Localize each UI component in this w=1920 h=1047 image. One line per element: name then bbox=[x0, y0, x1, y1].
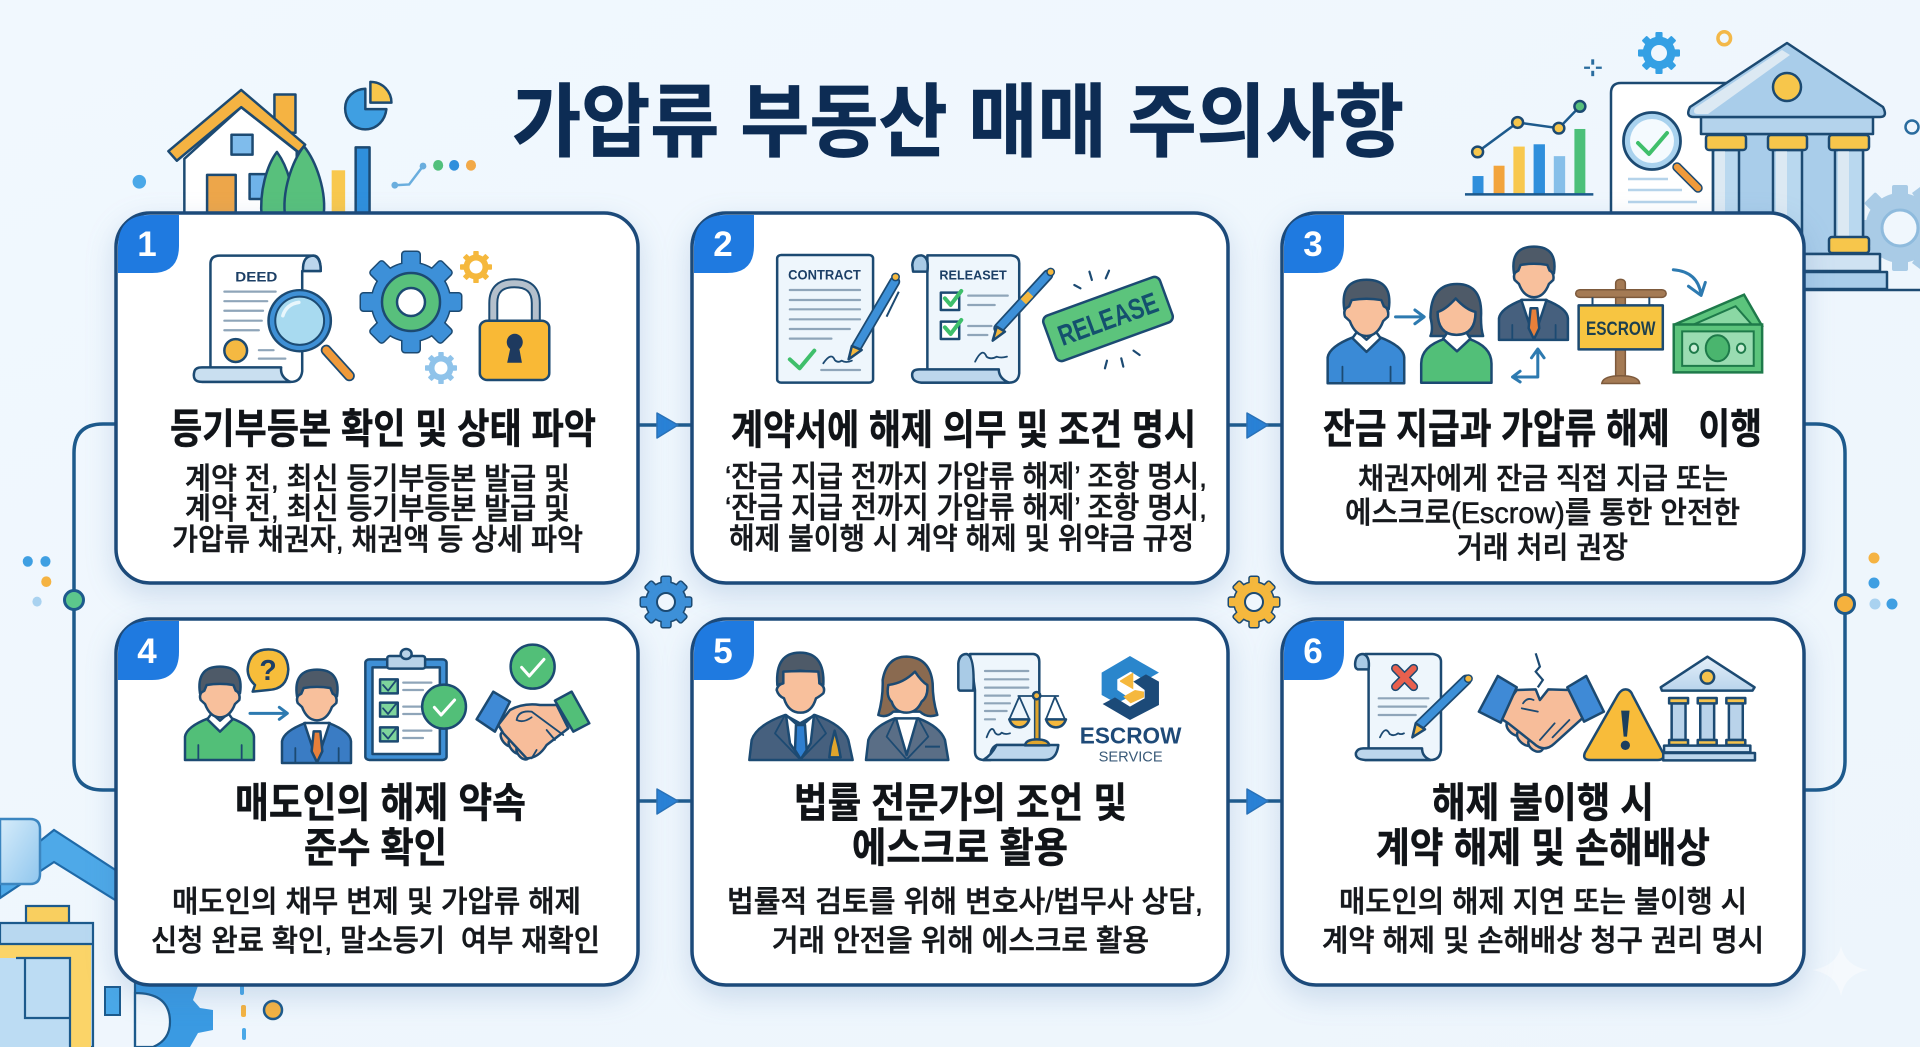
text block: 계약 해제 및 손해배상 청구 권리 명시 bbox=[1322, 925, 1764, 958]
icon: agent bbox=[1499, 247, 1568, 340]
text block bbox=[151, 886, 600, 958]
icon: trees bbox=[261, 146, 324, 218]
text block: 에스크로(Escrow)를 통한 안전한 bbox=[1345, 497, 1740, 530]
icon: ring right bbox=[1906, 120, 1918, 134]
stamp rays bbox=[1074, 271, 1140, 368]
text block: 매도인의 해제 지연 또는 불이행 시 bbox=[1339, 886, 1747, 919]
text block bbox=[1345, 463, 1740, 565]
icon: padlock bbox=[480, 283, 549, 380]
icon: chimney bbox=[274, 95, 295, 133]
text block bbox=[1322, 886, 1764, 958]
text block: ‘잔금 지급 전까지 가압류 해제’ 조항 명시, bbox=[725, 461, 1207, 494]
watermark sparkle bbox=[1812, 946, 1868, 996]
heading: 해제 불이행 시 bbox=[1432, 780, 1654, 826]
dots left bbox=[23, 556, 51, 607]
heading: 잔금 지급과 가압류 해제 이행 bbox=[1323, 406, 1762, 452]
text block bbox=[725, 461, 1207, 556]
icon: orange gear center bbox=[1229, 577, 1279, 627]
connector node right bbox=[1836, 594, 1854, 614]
connector node left bbox=[64, 590, 84, 610]
number badge 6 bbox=[1284, 621, 1344, 680]
icon: suited person bbox=[282, 670, 351, 763]
connector right bbox=[1804, 424, 1845, 790]
icon: large gear bottom left bbox=[135, 980, 213, 1047]
heading: 등기부등본 확인 및 상태 파악 bbox=[170, 406, 596, 452]
number badge 4: 4 bbox=[137, 632, 157, 671]
heading: 계약서에 해제 의무 및 조건 명시 bbox=[731, 407, 1196, 453]
icon: buyer bbox=[1328, 280, 1404, 383]
icon: seller person bbox=[185, 667, 254, 760]
heading: 계약 해제 및 손해배상 bbox=[1376, 825, 1710, 871]
icon: glass panel bbox=[0, 819, 40, 884]
icon: contract bbox=[777, 255, 899, 383]
number badge 5: 5 bbox=[713, 632, 733, 671]
icon: seller bbox=[1421, 284, 1491, 383]
text block: 해제 불이행 시 계약 해제 및 위약금 규정 bbox=[729, 523, 1194, 556]
bar chart with trend line bbox=[1465, 101, 1593, 194]
heading: 법률 전문가의 조언 및 bbox=[794, 780, 1127, 826]
icon: contract: CONTRACT bbox=[788, 268, 861, 283]
icon: escrow logo bbox=[1080, 656, 1182, 765]
icon: warning triangle bbox=[1584, 689, 1664, 760]
number badge 4 bbox=[118, 621, 179, 680]
mini line chart and dots bbox=[391, 160, 476, 189]
panel: step 5 bbox=[692, 619, 1228, 985]
arrow: bent double arrow bbox=[1513, 349, 1544, 382]
arrow: step 2 to 3 bbox=[1228, 413, 1282, 438]
icon: clipboard bbox=[365, 649, 466, 760]
icon: cancelled contract bbox=[1355, 654, 1472, 760]
number badge 2: 2 bbox=[713, 225, 733, 264]
number badge 1 bbox=[118, 215, 179, 273]
icons: deed, magnifier: DEED bbox=[235, 270, 277, 285]
icon: lawyer woman bbox=[866, 657, 948, 760]
text block: 법률적 검토를 위해 변호사/법무사 상담, bbox=[727, 886, 1203, 919]
connector left bbox=[74, 424, 116, 790]
icon: handshake with check bbox=[477, 645, 589, 762]
panel: step 4 bbox=[116, 619, 638, 985]
text block: 채권자에게 잔금 직접 지급 또는 bbox=[1358, 463, 1728, 496]
text block: 계약 전, 최신 등기부등본 발급 및 bbox=[185, 463, 570, 496]
panel: step 6 bbox=[1282, 619, 1804, 985]
icon: cash bbox=[1674, 295, 1762, 372]
heading: 준수 확인 bbox=[304, 825, 447, 871]
illustration: small ring and sparkle top right bbox=[1584, 32, 1731, 76]
panel: step 1 bbox=[116, 213, 638, 583]
icon: house window bbox=[231, 135, 253, 155]
icon: dashed line and ring bottom left bbox=[240, 984, 282, 1040]
icon: release checklist: RELEASET bbox=[939, 269, 1007, 283]
text block: ‘잔금 지급 전까지 가압류 해제’ 조항 명시, bbox=[725, 492, 1207, 525]
icon: house door bbox=[207, 175, 236, 217]
text block: 가압류 채권자, 채권액 등 상세 파악 bbox=[172, 524, 583, 557]
icon: blue gear center bbox=[641, 577, 691, 627]
heading bbox=[1376, 780, 1710, 871]
text block: 거래 처리 권장 bbox=[1457, 532, 1628, 565]
icon: background light gear bbox=[1857, 185, 1920, 271]
icons: deed, magnifier bbox=[194, 256, 349, 382]
icon: small bank bbox=[1661, 657, 1755, 760]
panel: step 2 bbox=[692, 213, 1228, 583]
number badge 3 bbox=[1284, 215, 1344, 273]
dot bbox=[133, 175, 146, 189]
arrow: step 5 to 6 bbox=[1228, 789, 1282, 814]
icon: bank building bbox=[1688, 43, 1920, 290]
icon: escrow sign bbox=[1576, 279, 1666, 383]
number badge 1: 1 bbox=[137, 225, 157, 264]
heading: 에스크로 활용 bbox=[852, 825, 1068, 871]
arrow: step 1 to 2 bbox=[638, 413, 692, 438]
icon: roof chevron bbox=[0, 830, 120, 903]
arrow: step 4 to 5 bbox=[638, 789, 692, 814]
number badge 2 bbox=[694, 215, 754, 273]
text block: 매도인의 채무 변제 및 가압류 해제 bbox=[172, 886, 581, 919]
icon: gears bbox=[361, 251, 492, 384]
text block: 계약 전, 최신 등기부등본 발급 및 bbox=[185, 493, 570, 526]
icon: building bbox=[0, 906, 120, 1047]
title: 가압류 부동산 매매 주의사항 bbox=[512, 78, 1404, 167]
arrow: curved bbox=[1673, 270, 1705, 295]
text block: 신청 완료 확인, 말소등기 여부 재확인 bbox=[151, 925, 600, 958]
arrow: to agent bbox=[250, 707, 287, 719]
icon: pie chart bbox=[345, 82, 391, 129]
icon: lawyer man bbox=[749, 653, 853, 760]
illustration: house and charts top left bbox=[23, 82, 476, 607]
icon: broken handshake bbox=[1479, 653, 1604, 754]
dots right bbox=[1868, 552, 1898, 610]
heading: 매도인의 해제 약속 bbox=[235, 780, 526, 826]
heading bbox=[235, 780, 526, 871]
icon: house body bbox=[184, 107, 297, 218]
icon: escrow sign: ESCROW bbox=[1586, 319, 1655, 340]
number badge 6: 6 bbox=[1303, 632, 1323, 671]
icon: question bubble: ? bbox=[259, 655, 277, 687]
icon: house side window bbox=[250, 174, 271, 199]
number badge 3: 3 bbox=[1303, 225, 1323, 264]
text block: 거래 안전을 위해 에스크로 활용 bbox=[772, 925, 1149, 958]
number badge 5 bbox=[694, 621, 754, 680]
panel: step 3 bbox=[1282, 213, 1804, 583]
icon: release stamp: RELEASE bbox=[1054, 287, 1163, 353]
icon: house roof bbox=[168, 90, 305, 161]
icon: release checklist bbox=[912, 255, 1054, 383]
illustration: building and gear bottom left bbox=[0, 819, 120, 1047]
bar chart bbox=[332, 147, 370, 218]
text block bbox=[172, 463, 583, 557]
icon: escrow logo: SERVICE bbox=[1099, 749, 1163, 765]
icon: audit document bbox=[1611, 83, 1730, 262]
heading bbox=[794, 780, 1127, 871]
icon: blue gear top bbox=[1638, 32, 1680, 74]
icon: legal scroll and scale bbox=[958, 654, 1066, 760]
icon: escrow logo: ESCROW bbox=[1080, 722, 1182, 748]
arrow: buyer to seller bbox=[1396, 310, 1424, 324]
text block bbox=[727, 886, 1203, 958]
